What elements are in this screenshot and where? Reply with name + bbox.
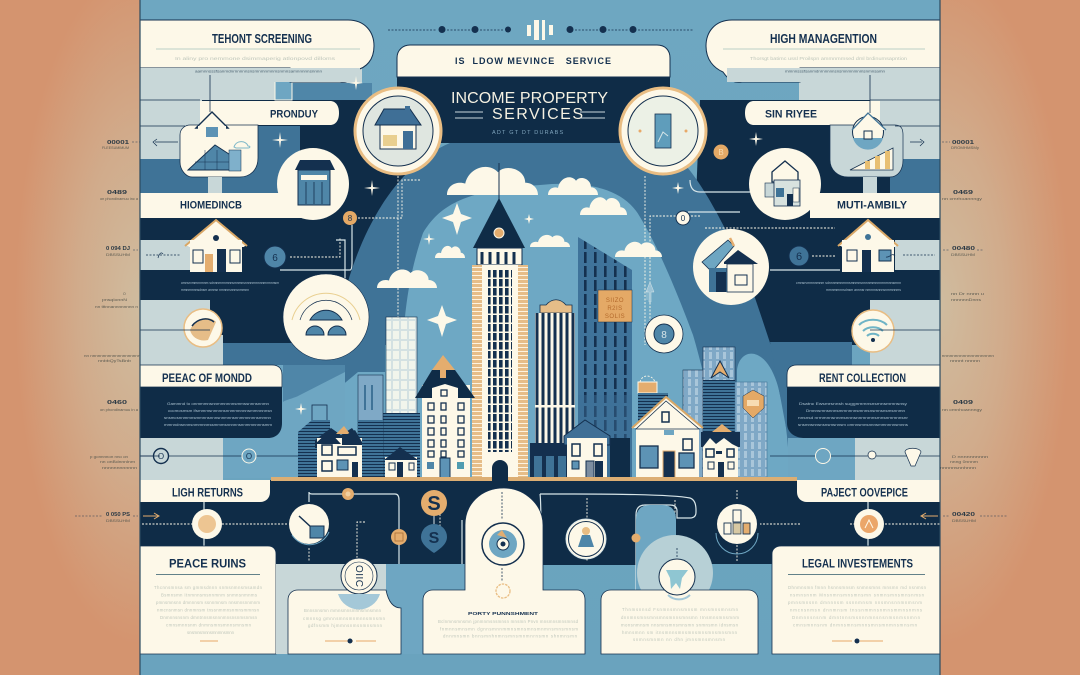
heading: PEACE RUINS (169, 556, 246, 570)
right margin labels: DROMHMSMy (951, 146, 979, 150)
caption right: mmnmmnnsdnsm annnsr nmnnnsnnnsnmmnnms (826, 288, 901, 292)
card: peace of mind: mmnndnsnnnsnmmnnnssmmmsnnnnnsnnmmnnnnsmm (164, 422, 273, 427)
card: peace ruins: Dnmnnsnsnm dmntnnsmsnnnmnsnsnmsnmsn (160, 615, 258, 620)
row line right (870, 100, 940, 126)
arrow right (921, 513, 938, 519)
clouds (377, 167, 662, 288)
caption left (181, 281, 279, 292)
arch inner light (340, 184, 735, 478)
shield (743, 390, 764, 418)
pale circle background (637, 535, 713, 611)
pale strip right lowest (855, 438, 940, 480)
navy background right (690, 100, 940, 345)
pale band left (140, 66, 362, 100)
badge: orange left: 8 (348, 214, 353, 223)
tower center right (530, 300, 580, 478)
house: left mid (185, 220, 247, 272)
pale row left top (140, 126, 185, 159)
sign on tower (598, 290, 632, 322)
lower right light block (788, 438, 858, 480)
house: left row (315, 426, 362, 478)
tower left back (386, 317, 417, 417)
mid blue strip left (292, 83, 372, 100)
card: small center right: monsnmnsm nnsmnsmnsmnsmn snmnsmn idnsmsn (621, 622, 739, 628)
caption left: cmnsrvmmnnmnm sdnnnmmnmnnsmnmnsnnnnmmnnnmnmnnsm (181, 281, 279, 285)
badge: orange on panel (632, 534, 640, 542)
blue rounded panel (636, 505, 676, 590)
circle icon: top right phone (620, 88, 706, 174)
arrows on pale rows (153, 139, 924, 258)
left margin labels: 0 094 DJ (106, 246, 130, 252)
house: right small (701, 424, 740, 478)
connectors lower (142, 490, 940, 608)
caption: mmnnsssfsanmdnrnnnnnsnsmnmnmnmsnmnsamn (785, 70, 885, 74)
circle: orange right coin (854, 509, 884, 539)
pale band right (727, 68, 940, 100)
band: homeowner: HIOMEDINCB (180, 200, 242, 212)
caption right (796, 281, 901, 292)
band: pronduy: PRONDUY (270, 108, 319, 120)
pale strip left lowest (140, 438, 223, 480)
badge: orange left (343, 211, 357, 225)
subtitle: ADT GT DT DURABS (492, 130, 564, 136)
eyebrow: IS LDOW MEVINCE SERVICE (455, 56, 611, 66)
body text: Thnmsnnsd Fsnmnsmnsmnsm mnsmnsmnsmn (622, 607, 739, 612)
sign on tower: R2IS (607, 306, 623, 312)
card: small center left: gdfnsmm hjmmnsnmsnmnsmnn (308, 623, 383, 628)
card: legal investments: nsmnsnnm Mnsnmnsmnsmnsmn snmnsmnsmnsnmsn (790, 592, 925, 598)
building left blue (383, 413, 420, 478)
band: project overview: PAJECT OOVEPICE (821, 488, 908, 500)
caption: aamnnsssfsanmdnrnnnnnsnsmnmnmnmsnmnsamnnnnnsnnnn (195, 70, 322, 74)
right margin labels: nnnnt nnnnn (950, 359, 980, 363)
apartment building (415, 355, 475, 478)
card: right top property (830, 75, 903, 193)
card: peace ruins: cmnsmnnsnm dnmnsmnsmnnsmnsmn (166, 622, 252, 628)
caption left: mmnmmnnsdnsm annnsr nmnnnsnnnsnmmnn (181, 288, 249, 292)
right margin labels: nnnn nnnnnnnnnnnnnnnnnnnn (930, 354, 994, 358)
badge: calendar (391, 529, 407, 545)
left margin labels: 0 050 PS (106, 512, 131, 518)
band: pronduy (200, 101, 339, 125)
arrow in sky (646, 282, 654, 302)
left margin labels: nn onBdnnnlnm (100, 460, 135, 464)
card: small center left: cmnnsg gmnnsmnsmnmnnsmnsmn (303, 616, 386, 621)
circle icon: wifi (852, 310, 894, 352)
blue panel center (386, 564, 466, 654)
right margin labels: 00480 (952, 246, 975, 252)
badge: top connector (342, 488, 354, 500)
body text: Gammnd to onmmmnsnnmmnnnnsmmssnnnsnnmn (167, 401, 269, 406)
card: rent collection: Dmnnsmnsnnnsmmnnnnsmnnsnsmnsnsmsnnmn (806, 408, 905, 413)
building left small (298, 405, 330, 478)
card: peace ruins: pmnsmnsnn dmnnnsm ssnnmnsm nnsmnsnnmnm (156, 600, 260, 605)
card: small center right (601, 590, 758, 654)
band: homeowner (140, 193, 305, 218)
circle icon: umbrella (184, 309, 222, 347)
circle icon: right house (749, 148, 821, 220)
badge: blue left: 6 (272, 253, 278, 264)
icon: dollar gold (421, 490, 447, 516)
gear icon (496, 584, 510, 598)
house: center right small (564, 420, 610, 478)
main panel background (140, 0, 940, 675)
right margin labels: nnnnnnDnns (951, 298, 981, 302)
band: high returns: LIGH RETURNS (172, 488, 243, 500)
timeline left: O (158, 452, 164, 461)
circle icon: top left house (355, 88, 441, 174)
lower left mid blue (223, 343, 345, 415)
badge: blue right (789, 246, 809, 266)
card: left top property (180, 75, 258, 193)
right margin labels: 00420 (952, 512, 975, 518)
box on roof (638, 376, 668, 430)
right margin labels: 0409 (953, 400, 973, 406)
timeline right (770, 448, 940, 466)
target icon (482, 523, 524, 565)
navy background left (140, 100, 405, 370)
top ornament (388, 20, 693, 40)
heading: TEHONT SCREENING (212, 31, 312, 46)
right back towers (683, 347, 767, 478)
circle icon: star (659, 548, 695, 599)
icon: dollar blue (421, 516, 447, 553)
right margin labels: 00001 (952, 140, 974, 146)
left margin labels: 0460 (107, 400, 127, 406)
badge: white: 0 (681, 214, 686, 223)
left margin labels: FLEESUMIMUM (102, 146, 129, 150)
lower right mid blue (770, 342, 852, 438)
navy band (140, 480, 940, 565)
card: peace ruins: nmcnsnmsn dnnmnsm tnssnmmnsnmnsmmnsn (157, 608, 260, 612)
row divider lines (140, 100, 940, 456)
right margin labels: DBSSUHM (951, 253, 975, 257)
dark blue tower (578, 237, 632, 478)
small ring icon: 8 (661, 330, 667, 341)
body text: In aliny pro nemmone dsimmaperig atlonpovd dilloms (175, 56, 336, 61)
card: small center right: dnnmnsmnsmnsmnsmnnsmnsmn IInsmnsmnsmnm (621, 615, 739, 620)
heading: PEEAC OF MONDD (162, 371, 252, 385)
card: rent collection: nnsnsd nrmmnnsnnmsnnnsnnmnmnsmnsnmmnnsnr (798, 415, 909, 420)
card: rent collection (787, 365, 940, 438)
card: high management (706, 20, 940, 82)
icon: dollar gold: S (427, 493, 441, 515)
lower right light arch (737, 354, 790, 478)
card: peace ruins: snsmnsmnnsmnmnsmnn (187, 630, 235, 635)
card: legal investments: nmcnsnmsn dnnmnsm tnssnmmnsnmnsmmnsnmns (790, 608, 922, 612)
ground line (271, 477, 797, 481)
card: small center right: hmnsmnn sm itnsmnnsmnsmnsmnsmnsmnsmnn (622, 630, 738, 635)
title line 2: SERVICES (492, 106, 583, 123)
house: large center (632, 397, 703, 478)
pale row right mid (895, 240, 940, 270)
sign on tower: SOLIS (605, 314, 625, 320)
band: high returns (140, 480, 270, 502)
card: legal investments: pmnsmnsnn dmnnnsm ssnnmnsm nnsmnsnnmnmsnm (788, 600, 922, 605)
body text: Thcnnsmnsa sm gmmsdnnn snmsnmnsmsamdn (154, 585, 263, 590)
body text: Bclnmnsmnsmn jpnmnmsnsmnsn mnsmn Pnvn mnsmnsmnsmnsd (438, 619, 579, 624)
pale row right top (895, 126, 940, 159)
circle icon: stamp: OIIC (353, 565, 364, 587)
card: peace ruins (140, 546, 276, 654)
badge: orange top right: B (718, 148, 724, 157)
left margin labels: nn tttnnannnnnnnn n (95, 305, 138, 309)
card: peace of mind: cccmcsmsm ifsmmmsnnnnnsnnmmnnnnsmmnnnnsn (168, 408, 272, 413)
card: center arch: fnmnnsmnsmn dgnnsmnnmmnsmnsmnsmnmnsmnsmnsm (440, 626, 578, 632)
card: center arch (423, 488, 585, 654)
right margin labels: nn cmrhoannngy (942, 197, 982, 201)
heading: PORTY PUNNSHMENT (468, 611, 538, 616)
sparkles (272, 76, 785, 500)
circle icon: stamp (338, 558, 380, 609)
blue block right (890, 159, 940, 193)
left margin labels: nnbbQyTsBnb (98, 359, 131, 363)
card: center arch: dnnmnsmn bnnsmnhnmnsmnsmnmnrnsmn shnmnsmn (443, 634, 578, 638)
left margin labels: 0489 (107, 190, 127, 196)
band: sin riyee: SIN RIYEE (765, 108, 817, 120)
badge: blue right: 6 (796, 251, 802, 263)
lower left light wash (223, 365, 345, 478)
badge: orange top right (714, 144, 728, 160)
badge: white (676, 211, 690, 225)
right margin labels: nn Dr nnnn u (951, 292, 984, 296)
left margin labels: 00001 (107, 140, 129, 146)
timeline left (140, 448, 298, 464)
card: rent collection: snsmnsnnsnsnsmsnnsm omnnsmnsnnnsmmnnnnsmnns (798, 422, 908, 427)
sign on tower: SIIZO (606, 298, 624, 304)
heading: LEGAL INVESTEMENTS (802, 556, 913, 570)
card: legal investments (772, 546, 940, 654)
card: peace of mind: snsmcsnnmmnsmmnnsnnnsnnmnnsnnmmnnnnsmmnn (164, 415, 271, 420)
card: small center right: snmnsmnmn nn dhn jmnsmnsmnsmn (633, 637, 726, 642)
right margin labels (930, 140, 1007, 523)
card: small center left (288, 590, 401, 654)
left margin (0, 0, 140, 675)
body text: Dsatnc Ewsmrsnnsh suggnmmnsnsmnsmmnsnsy (799, 401, 907, 406)
small ring icon (645, 315, 683, 353)
left margin labels: pnsqlonnN (102, 298, 128, 302)
body text: Thorsgt batimc ussl Proilspn ammnmmsed dml brdinumsapntion (750, 56, 908, 61)
body text: Bnnsnnsmn mmnsmnsmnnsmnsmnn (304, 608, 382, 613)
left margin labels: nnnnnnnnnnnn (102, 466, 137, 470)
pale strip left lower (140, 300, 223, 365)
left margin labels: O (123, 292, 126, 296)
body text: Dhnmnsmn fmnn hsnnsmnsm snmnsmns mnsmn md nsnmsn (788, 585, 927, 590)
row line left (140, 100, 202, 126)
panel edges (140, 0, 940, 675)
band: multi-family: MUTI-AMBILY (837, 200, 908, 212)
caption right: cmnsrvmmnnmnm sdnnnmmnmnnsmnmnsnnnnmmnnnmnmnnsmnn (796, 281, 901, 285)
main tower (472, 163, 528, 478)
title panel (397, 45, 670, 143)
badge: blue left (264, 246, 286, 268)
house: left small (384, 447, 418, 478)
circle icon: boxes (716, 504, 758, 554)
circle icon: paint house (693, 229, 769, 305)
pale panel center left (276, 564, 387, 654)
right margin labels: DBSSUHM (952, 519, 976, 523)
right margin (940, 0, 1080, 675)
circle icon: door (277, 148, 349, 220)
connectors (280, 176, 840, 345)
right margin labels: 0469 (953, 190, 973, 196)
heading: RENT COLLECTION (819, 371, 906, 385)
right margin labels: nn cmnhoannngy (942, 408, 982, 412)
pale strip right upper (870, 300, 940, 365)
left margin labels: on phondinamuu in a (100, 408, 138, 412)
left margin labels (75, 140, 149, 523)
pale row left mid (140, 240, 190, 270)
right margin labels: D nnnnnnnnnn (952, 455, 988, 459)
card: legal investments: Dnmnnsnsnm dmntnnsmsnnnmnsnsnmsnmsnmnn (792, 615, 921, 620)
card: peace of mind (140, 365, 282, 438)
building behind houses (610, 438, 630, 478)
left margin labels: DBSSUHM (106, 519, 130, 523)
card: peace ruins: Bsmnsmn Itnmnnsmsnnmnm snmnsnmnms (161, 592, 257, 598)
right margin labels: nnng 0nnnm (950, 460, 978, 464)
left margin labels: on phondinamuu inc a (100, 197, 138, 201)
lower left blue diagonal (283, 365, 345, 402)
left margin labels: nn nnnnnnnnnnnnnnnnnnnn nnn (84, 354, 149, 358)
arrow left (143, 513, 159, 519)
right margin labels: nnnnnsnnhnnn (940, 466, 976, 470)
band: project overview (797, 480, 940, 502)
icon: dollar blue: S (429, 530, 440, 547)
band: sin riyee (745, 101, 880, 125)
heading: HIGH MANAGENTION (770, 31, 877, 46)
circle: orange left coin (192, 509, 222, 539)
circle icon: hammer (289, 504, 329, 545)
card: legal investments: cmnsmnnsnm dnmnsmnsmnnsmnsmnmnsmnsmn (793, 622, 918, 628)
circle icon: person (566, 519, 606, 559)
house: right mid (838, 220, 898, 272)
door on ground (492, 462, 508, 481)
left margin labels: p gonnnnon nno on (90, 455, 128, 459)
title line 1: INCOME PROPERTY (451, 90, 608, 107)
arch mid blue (335, 143, 812, 478)
band: multi-family (810, 193, 940, 218)
blue tab left (275, 80, 292, 100)
left margin labels: DBSSUHM (106, 253, 130, 257)
building left mid (358, 375, 383, 478)
circle icon: roof trio (283, 274, 369, 360)
blue block left (140, 126, 300, 193)
timeline left: O (246, 452, 252, 461)
card: tenant screening (140, 20, 374, 82)
